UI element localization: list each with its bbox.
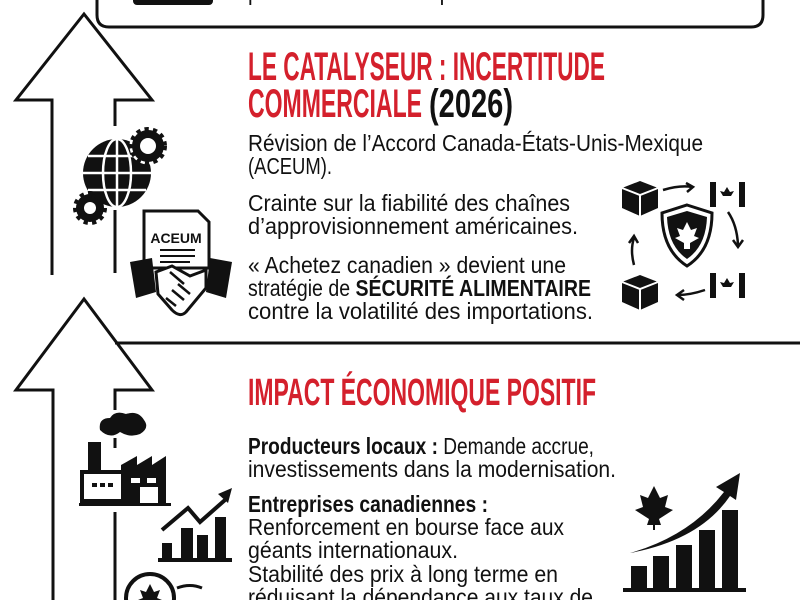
text block: impact: Entreprises canadiennes : [248,491,488,517]
text block: catalyseur: (ACEUM). [248,153,332,179]
icon: globe with gears [76,129,165,222]
top panel remnant [97,0,763,27]
heading: catalyseur: (2026) [429,82,513,126]
heading: catalyseur [248,45,605,126]
text block: impact: Renforcement en bourse face aux [248,514,564,540]
text block: catalyseur: d’approvisionnement américaines. [248,213,578,239]
icon: ACEUM document and handshake [130,211,232,315]
text block: impact: Stabilité des prix à long terme en [248,561,558,587]
icon: small growth chart [158,488,232,562]
text block: catalyseur: Crainte sur la fiabilité des chaînes [248,190,570,216]
icon: coin with maple leaf [126,574,202,600]
icon: factory [79,413,171,506]
heading: catalyseur: COMMERCIALE [248,82,422,126]
divider [115,342,800,344]
text block: impact: Producteurs locaux : Demande accrue, [248,433,594,459]
text block: impact: géants internationaux. [248,537,458,563]
arrow 2 [16,299,152,600]
arrow 1 [16,14,152,275]
icon: maple leaf growth chart [623,473,746,592]
text block: catalyseur: stratégie de SÉCURITÉ ALIMENTAIRE [248,274,591,301]
text block: catalyseur: Révision de l’Accord Canada-États-Unis-Mexique [248,130,703,156]
text block: impact: investissements dans la modernisation. [248,456,616,482]
text block: catalyseur: contre la volatilité des importations. [248,298,593,324]
text block: impact [248,433,616,600]
icon: ACEUM document and handshake: ACEUM [150,230,202,246]
icon: supply chain with shield [622,181,745,310]
text block: catalyseur: « Achetez canadien » devient une [248,252,566,278]
text block: catalyseur [248,130,703,324]
